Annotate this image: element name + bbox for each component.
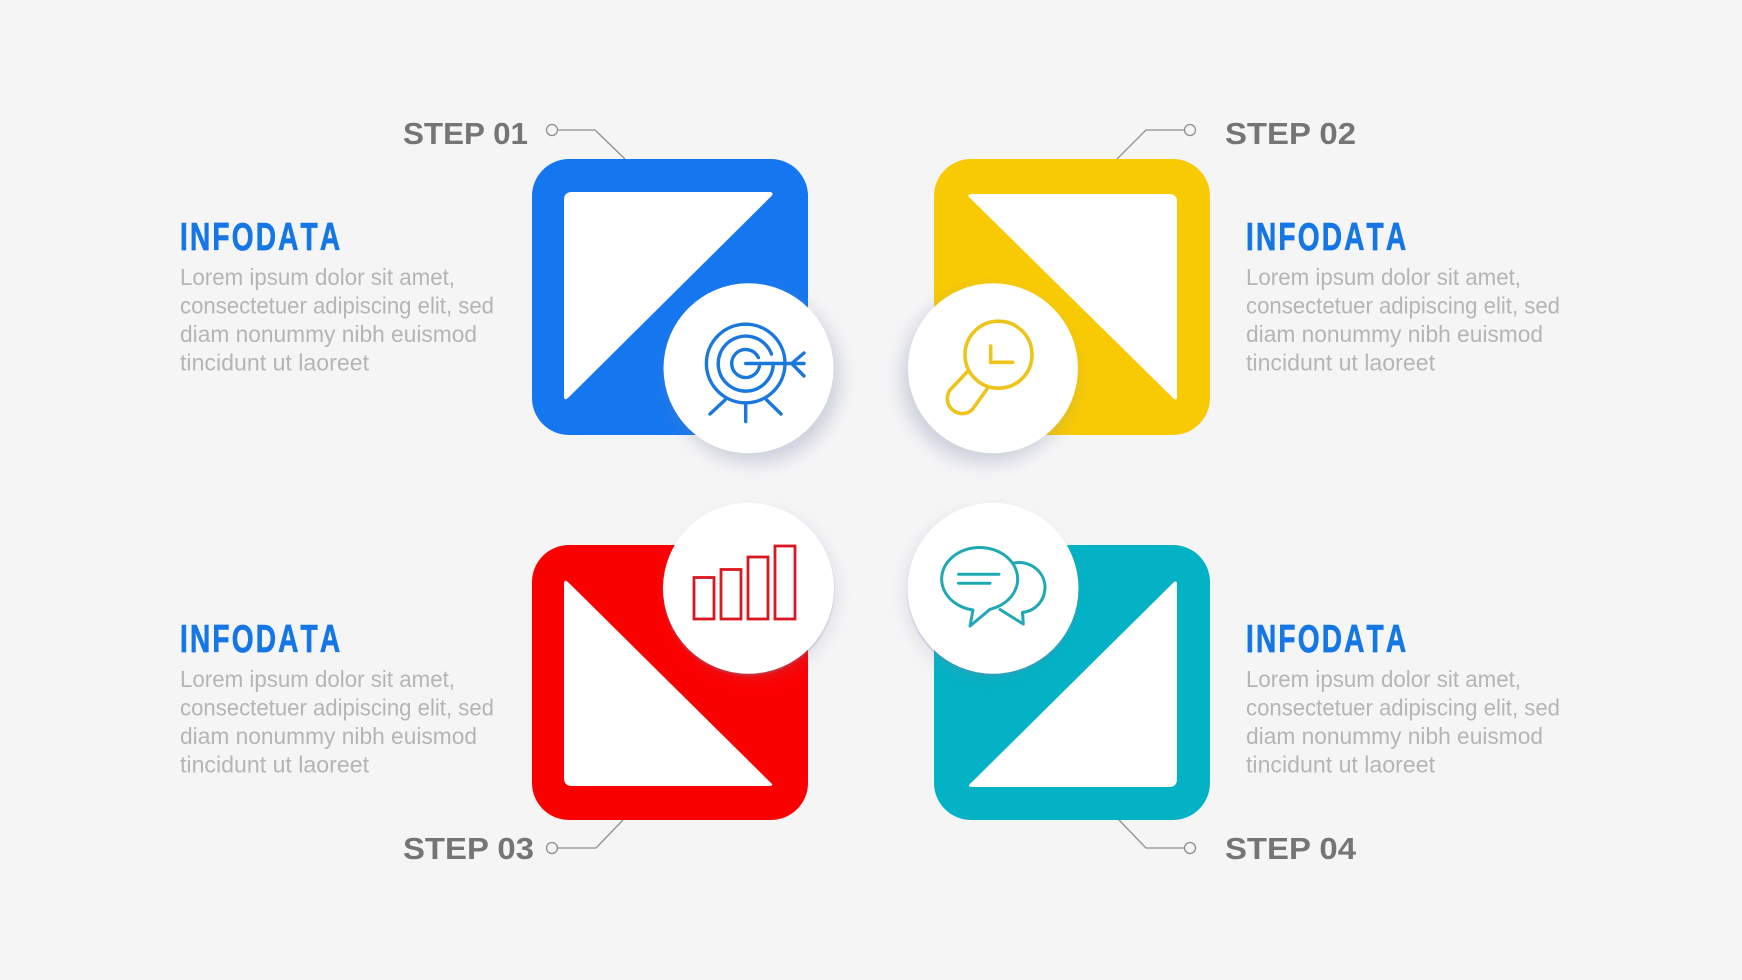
- icon circle 01: [664, 283, 834, 453]
- body text 01: [180, 264, 494, 376]
- body text 01: Lorem ipsum dolor sit amet,: [180, 264, 455, 290]
- body text 03: tincidunt ut laoreet: [180, 752, 370, 778]
- yellow square: [934, 159, 1210, 435]
- heading 03: INFODATA: [180, 618, 342, 661]
- body text 04: Lorem ipsum dolor sit amet,: [1246, 666, 1521, 692]
- heading 04: INFODATA: [1246, 618, 1408, 661]
- icon circle 02: [908, 283, 1078, 453]
- body text 03: Lorem ipsum dolor sit amet,: [180, 666, 455, 692]
- white triangle 02: [968, 194, 1177, 400]
- body text 03: diam nonummy nibh euismod: [180, 723, 477, 749]
- heading 02: INFODATA: [1246, 216, 1408, 259]
- step 02 label: STEP 02: [1225, 116, 1356, 151]
- icon circle 03: [663, 503, 834, 674]
- leader line 01: [546, 124, 625, 159]
- body text 02: [1246, 264, 1560, 376]
- icon: bar chart: [694, 546, 795, 619]
- icon: speech bubbles: [942, 547, 1045, 626]
- leader line 02: [1117, 124, 1196, 159]
- icon: target: [706, 324, 804, 422]
- body text 01: tincidunt ut laoreet: [180, 350, 370, 376]
- icon circle 04: [908, 503, 1078, 674]
- body text 04: [1246, 666, 1560, 778]
- body text 02: diam nonummy nibh euismod: [1246, 321, 1543, 347]
- body text 02: tincidunt ut laoreet: [1246, 350, 1436, 376]
- panel: step 03: [180, 503, 834, 866]
- step 03 label: STEP 03: [403, 831, 534, 866]
- step 01 label: STEP 01: [403, 116, 528, 151]
- panel: step 01: [180, 116, 834, 453]
- icon: magnifier with clock: [947, 321, 1032, 414]
- body text 04: consectetuer adipiscing elit, sed: [1246, 694, 1560, 720]
- panel: step 04: [908, 503, 1560, 866]
- body text 03: consectetuer adipiscing elit, sed: [180, 694, 494, 720]
- leader line 04: [1119, 820, 1196, 854]
- leader line 03: [546, 820, 623, 854]
- heading 01: INFODATA: [180, 216, 342, 259]
- white triangle 01: [564, 192, 773, 399]
- body text 01: diam nonummy nibh euismod: [180, 321, 477, 347]
- blue square: [532, 159, 808, 435]
- body text 04: tincidunt ut laoreet: [1246, 752, 1436, 778]
- teal square: [934, 545, 1210, 820]
- body text 02: consectetuer adipiscing elit, sed: [1246, 292, 1560, 318]
- body text 04: diam nonummy nibh euismod: [1246, 723, 1543, 749]
- body text 02: Lorem ipsum dolor sit amet,: [1246, 264, 1521, 290]
- white triangle 03: [564, 581, 772, 786]
- body text 03: [180, 666, 494, 778]
- red square: [532, 545, 808, 820]
- step 04 label: STEP 04: [1225, 831, 1357, 866]
- white triangle 04: [969, 581, 1177, 787]
- body text 01: consectetuer adipiscing elit, sed: [180, 292, 494, 318]
- panel: step 02: [908, 116, 1560, 453]
